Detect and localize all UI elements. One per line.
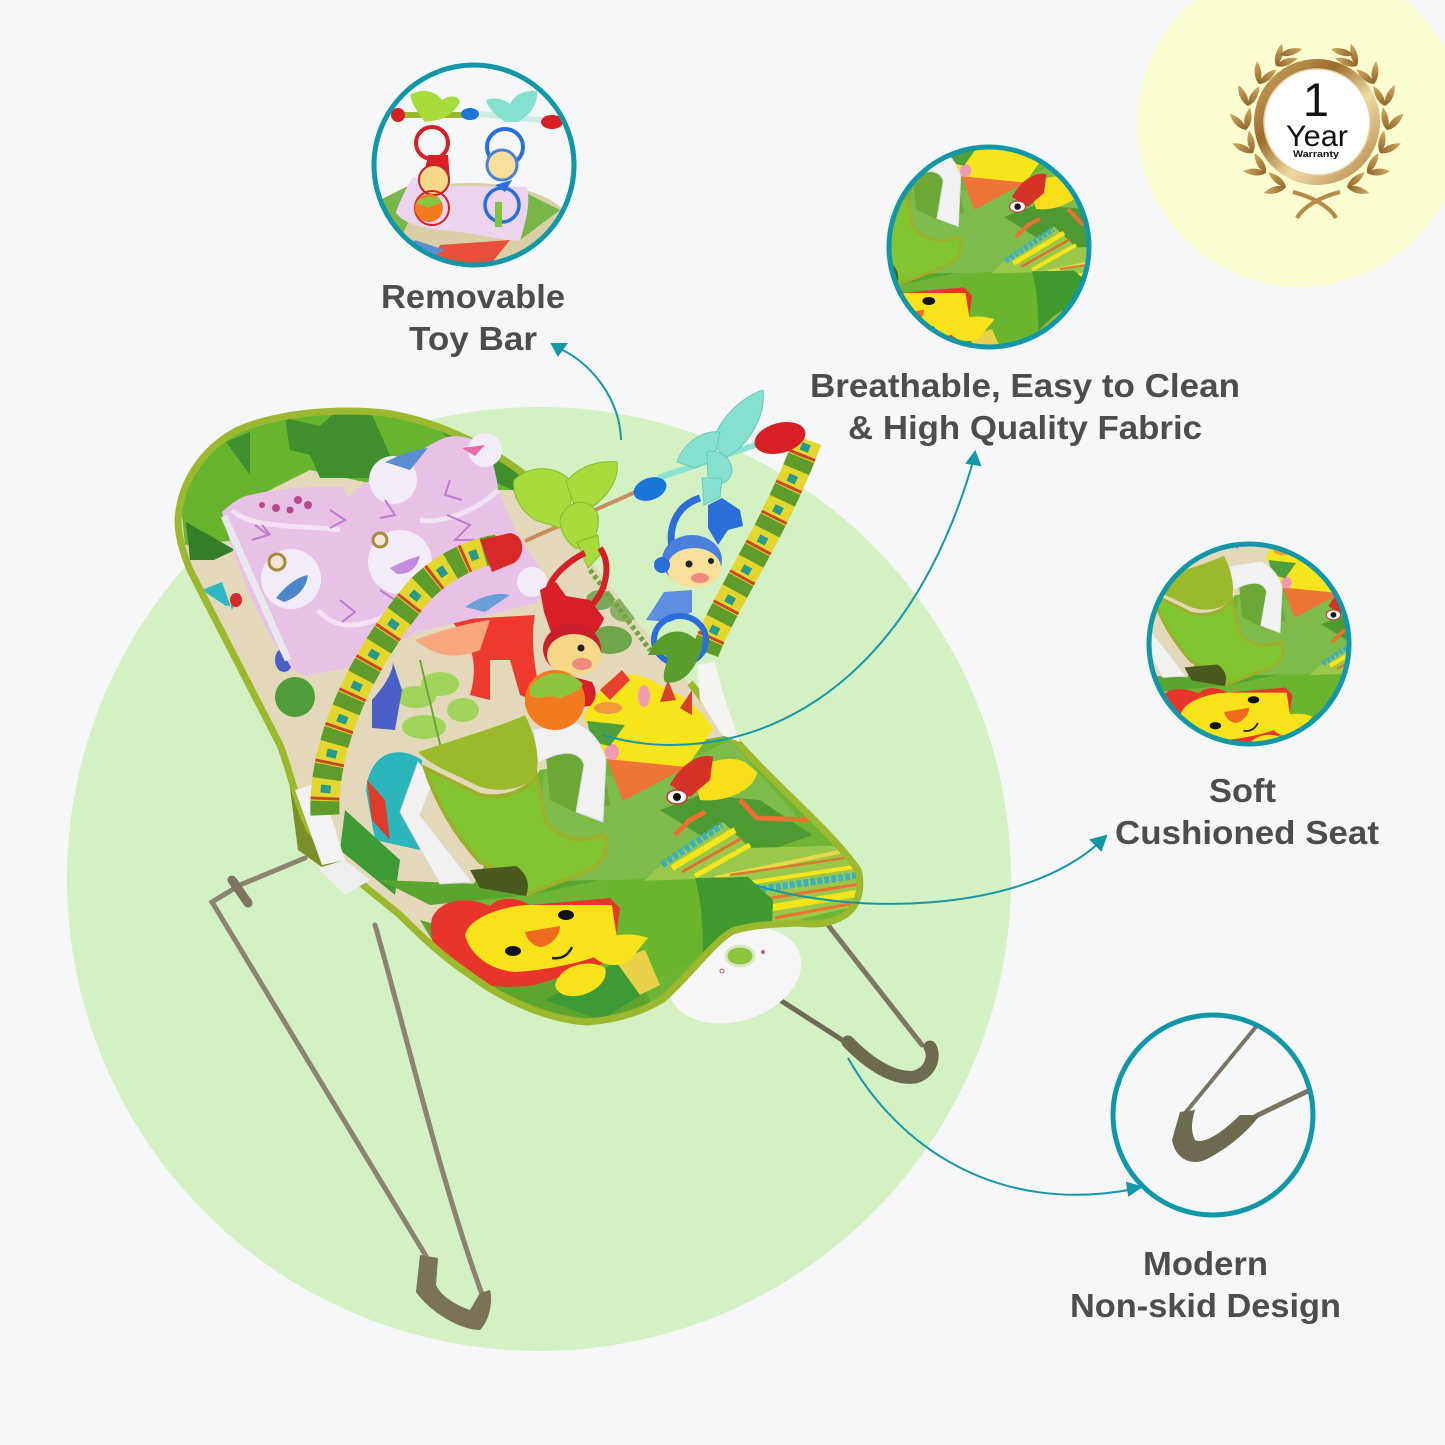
bouncer frame legs <box>212 858 932 1330</box>
label: removable toy bar: Toy Bar <box>409 320 537 357</box>
red monkey toy <box>525 548 606 730</box>
front leaf print <box>595 877 773 985</box>
label: breathable fabric: & High Quality Fabric <box>848 409 1202 446</box>
front foot grip <box>848 1042 932 1077</box>
badge word warranty: Warranty <box>1293 149 1339 159</box>
arrow: seat <box>755 836 1106 904</box>
label: soft cushioned seat: Cushioned Seat <box>1115 814 1379 851</box>
label: modern non-skid design: Modern <box>1143 1245 1268 1282</box>
toy bar <box>514 390 809 568</box>
fabric edge piping <box>178 411 860 1022</box>
thumbnail blue monkey <box>487 129 523 165</box>
teal flower <box>366 752 422 850</box>
ballerina figures <box>276 575 308 602</box>
blue monkey toy <box>646 498 743 683</box>
green backdrop circle <box>67 407 1011 1351</box>
yellow corner circle <box>1137 0 1445 287</box>
green print behind pad <box>470 735 860 1020</box>
rod <box>525 490 640 541</box>
label: soft cushioned seat: Soft <box>1209 772 1276 809</box>
arrow: toy bar <box>552 344 621 440</box>
gold ring <box>1254 59 1380 185</box>
arrow: non-skid <box>848 1058 1141 1195</box>
pillow medallions <box>261 549 321 609</box>
label: removable toy bar <box>381 278 565 357</box>
label: modern non-skid design <box>1070 1245 1341 1324</box>
green leaves <box>514 462 617 568</box>
label: soft cushioned seat <box>1115 772 1379 851</box>
red tree <box>450 615 545 705</box>
red end cap <box>751 417 809 459</box>
arch left <box>325 549 498 815</box>
badge number: 1 <box>1303 73 1329 126</box>
thumbnail seat base <box>404 183 562 260</box>
leaf print at top <box>182 414 512 545</box>
thumbnail: seat <box>1146 542 1352 746</box>
bouncer seat fabric <box>170 400 860 1022</box>
arch left cap <box>480 533 522 572</box>
beige print plants <box>275 677 315 717</box>
frog print <box>660 756 812 850</box>
thumbnail: fabric <box>886 144 1092 350</box>
label: removable toy bar: Removable <box>381 278 565 315</box>
label: modern non-skid design: Non-skid Design <box>1070 1287 1341 1324</box>
white side brackets <box>295 782 345 865</box>
thumbnail bar <box>404 112 464 118</box>
music unit <box>656 910 814 1040</box>
teal leaves <box>677 390 763 505</box>
rear frame <box>285 750 375 880</box>
stripe border <box>640 822 860 925</box>
rear foot grip <box>416 1255 491 1330</box>
label: breathable fabric <box>810 367 1240 446</box>
harness pad <box>418 715 606 896</box>
thumbnail red monkey <box>416 127 448 159</box>
warranty badge <box>1227 43 1406 218</box>
arch right <box>705 440 808 652</box>
blue knob <box>630 473 670 505</box>
thumbnail: toy bar <box>370 65 574 267</box>
arrow: fabric <box>603 452 980 745</box>
bird and blue flower <box>202 582 240 610</box>
label: breathable fabric: Breathable, Easy to Clean <box>810 367 1240 404</box>
laurel wreath <box>1227 43 1406 218</box>
pillow bows and flowers <box>252 480 480 622</box>
thumbnail: non-skid foot <box>1113 1015 1313 1215</box>
lion print <box>431 898 648 996</box>
teether <box>648 632 702 683</box>
pillow <box>222 433 547 675</box>
badge word year: Year <box>1286 120 1348 153</box>
sun print <box>583 670 713 801</box>
harness straps <box>400 723 606 884</box>
white side piece <box>697 662 740 742</box>
thumbnail pillow <box>396 177 528 241</box>
fabric shell <box>178 411 860 1022</box>
